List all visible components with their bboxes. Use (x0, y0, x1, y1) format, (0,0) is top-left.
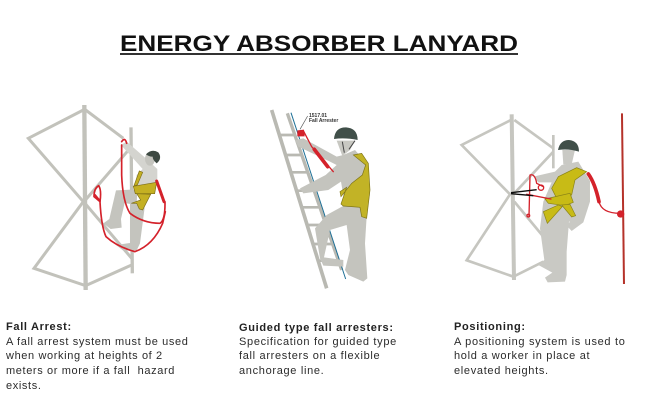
climber body (103, 142, 157, 251)
label: fall arrester (309, 113, 338, 124)
harness (543, 168, 587, 223)
harness (340, 153, 370, 218)
text block: guided type fall arresters: anchorage line. (239, 365, 324, 377)
title: ENERGY ABSORBER LANYARD (120, 31, 518, 56)
illustration: fall arrest climber on tower (28, 105, 165, 290)
vertical anchor line (622, 113, 624, 284)
helmet and face (558, 140, 579, 164)
ladder (272, 110, 342, 288)
helmet and face (334, 127, 358, 156)
text block: positioning (454, 321, 626, 377)
text block: fall arrest: A fall arrest system must be used (6, 336, 188, 348)
illustration: positioning worker (462, 113, 624, 284)
text block: positioning: A positioning system is used to (454, 336, 626, 348)
text block: positioning: elevated heights. (454, 365, 549, 377)
text block: guided type fall arresters: Guided type fall arresters: (239, 322, 394, 334)
anchor point (617, 210, 624, 218)
text block: fall arrest: when working at heights of 2 (5, 350, 163, 362)
label: fall arrester: 1517.01 (309, 113, 327, 119)
red lanyard (94, 140, 165, 252)
harness (131, 171, 157, 210)
energy absorber lanyard (298, 130, 333, 172)
pointer line (300, 116, 308, 129)
text block: fall arrest: meters or more if a fall hazard (6, 365, 175, 377)
climber body (295, 138, 370, 282)
black snap hooks (511, 190, 537, 196)
text block: fall arrest: Fall Arrest: (6, 321, 72, 333)
tower frame (462, 114, 553, 280)
label: fall arrester: Fall Arrester (309, 118, 338, 124)
tower frame (28, 105, 132, 290)
illustration: guided type fall arrester on ladder (272, 110, 370, 288)
rear anchorage lanyard (588, 174, 620, 213)
positioning lanyard (527, 175, 551, 217)
text block: guided type fall arresters: Specification for guided type (239, 336, 397, 348)
worker body (533, 162, 590, 282)
text block: positioning: hold a worker in place at (454, 350, 590, 362)
text block: guided type fall arresters: fall arresters on a flexible (239, 350, 380, 362)
text block: guided type fall arresters (239, 322, 397, 377)
text block: positioning: Positioning: (454, 321, 526, 333)
text block: fall arrest: exists. (6, 380, 42, 392)
head (145, 151, 160, 166)
text block: fall arrest (5, 321, 188, 392)
guide line (291, 113, 346, 279)
